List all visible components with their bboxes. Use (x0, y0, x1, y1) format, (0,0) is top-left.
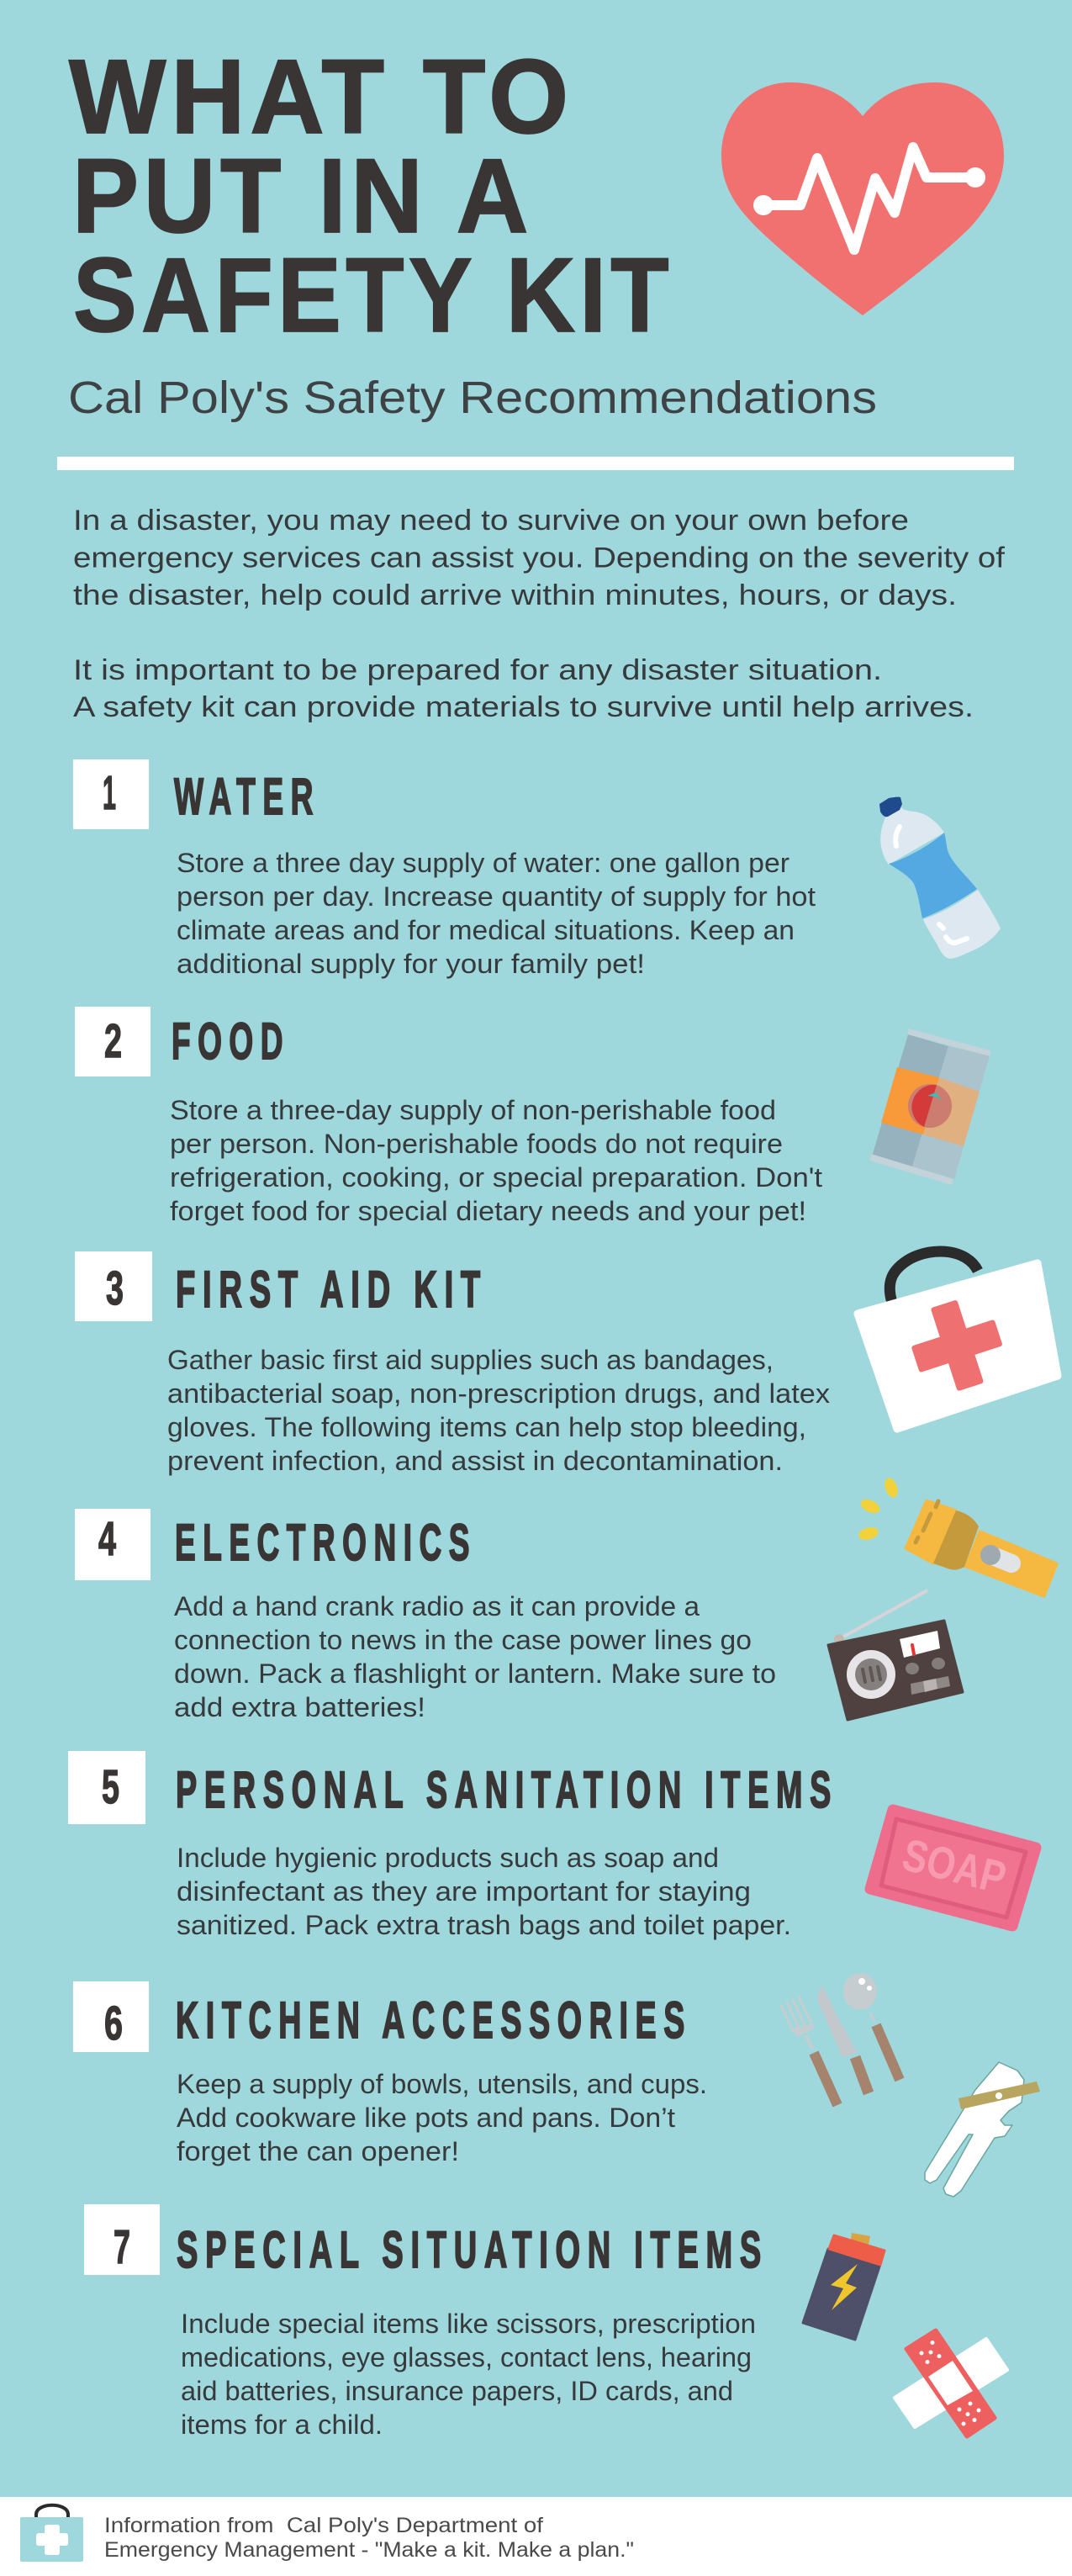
body text: kitchen accessories: forget the can opener! (177, 2136, 459, 2166)
panel: 1 water (73, 759, 1001, 979)
intro text: It is important to be prepared for any disaster situation. (73, 654, 882, 686)
panel: 6 kitchen accessories (73, 1973, 1040, 2197)
body text: water: climate areas and for medical situations. Keep an (177, 915, 795, 945)
number badge 4: 4 (98, 1512, 116, 1566)
icon: first aid kit (858, 1251, 1058, 1429)
icon: flashlight (858, 1476, 1058, 1597)
body text: kitchen accessories: Add cookware like pots and pans. Don’t (177, 2103, 675, 2133)
icon: battery (803, 2233, 885, 2340)
footer (0, 2497, 1072, 2576)
body text: electronics: add extra batteries! (174, 1692, 425, 1722)
title: WHAT TO (69, 39, 573, 156)
number badge 2 (75, 1007, 151, 1076)
number badge 3 (75, 1251, 152, 1321)
number badge 6: 6 (104, 1997, 123, 2050)
body text: special situation items: medications, eye glasses, contact lens, hearing (181, 2342, 752, 2372)
footer text (104, 2514, 634, 2562)
body text: electronics (174, 1591, 776, 1722)
icon: fork, knife and spoon (781, 1973, 900, 2105)
heading: food: FOOD (172, 1013, 290, 1070)
body text: personal sanitation items: sanitized. Pack extra trash bags and toilet paper. (177, 1910, 791, 1940)
body text: food: refrigeration, cooking, or special preparation. Don't (170, 1162, 822, 1193)
body text: kitchen accessories: Keep a supply of bowls, utensils, and cups. (177, 2069, 707, 2099)
body text: special situation items: aid batteries, insurance papers, ID cards, and (181, 2376, 733, 2406)
intro text: emergency services can assist you. Depending on the severity of (73, 542, 1006, 574)
number badge 7: 7 (114, 2220, 130, 2274)
footer text: Emergency Management - "Make a kit. Make a plan." (104, 2538, 634, 2562)
number badge 5 (68, 1751, 145, 1824)
heading: first aid kit: FIRST AID KIT (176, 1261, 488, 1318)
number badge 2: 2 (104, 1014, 122, 1068)
footer text: Information from Cal Poly's Department of (104, 2514, 543, 2537)
body text: first aid kit (167, 1345, 830, 1476)
intro text: In a disaster, you may need to survive on your own before (73, 505, 909, 537)
icon: soap bar: SOAP (898, 1829, 1011, 1904)
body text: first aid kit: antibacterial soap, non-prescription drugs, and latex (167, 1378, 830, 1409)
body text: first aid kit: gloves. The following items can help stop bleeding, (167, 1412, 806, 1442)
number badge 7 (84, 2204, 160, 2275)
number badge 4 (75, 1509, 151, 1580)
panel: 2 food (75, 1007, 990, 1226)
body text: water (177, 848, 816, 979)
body text: first aid kit: Gather basic first aid supplies such as bandages, (167, 1345, 774, 1375)
icon: footer first aid bag (20, 2505, 83, 2562)
intro text: A safety kit can provide materials to survive until help arrives. (73, 691, 974, 723)
number badge 6 (73, 1981, 149, 2052)
body text: personal sanitation items (177, 1843, 791, 1940)
intro text: the disaster, help could arrive within minutes, hours, or days. (73, 579, 957, 611)
icon: food can (870, 1029, 990, 1185)
body text: kitchen accessories (177, 2069, 707, 2166)
title: SAFETY KIT (73, 237, 673, 354)
body text: food: Store a three-day supply of non-perishable food (170, 1095, 776, 1125)
panel: 3 first aid kit (75, 1251, 1058, 1476)
icon: heart with heartbeat line (721, 82, 1004, 315)
body text: electronics: down. Pack a flashlight or lantern. Make sure to (174, 1658, 776, 1689)
body text: food: per person. Non-perishable foods do not require (170, 1129, 783, 1159)
number badge 3: 3 (106, 1262, 124, 1315)
body text: food: forget food for special dietary needs and your pet! (170, 1196, 806, 1226)
body text: electronics: Add a hand crank radio as it can provide a (174, 1591, 700, 1621)
panel: 7 special situation items (84, 2204, 1007, 2440)
icon: water bottle (879, 797, 1001, 959)
number badge 5: 5 (102, 1760, 119, 1814)
body text: water: Store a three day supply of water: one gallon per (177, 848, 789, 878)
body text: personal sanitation items: disinfectant as they are important for staying (177, 1876, 751, 1907)
body text: electronics: connection to news in the case power lines go (174, 1625, 752, 1655)
body text: water: additional supply for your family pet! (177, 949, 645, 979)
heading: electronics: ELECTRONICS (175, 1514, 477, 1571)
title: PUT IN A (72, 138, 533, 255)
body text: first aid kit: prevent infection, and assist in decontamination. (167, 1446, 783, 1476)
body text: water: person per day. Increase quantity of supply for hot (177, 881, 816, 912)
body text: personal sanitation items: Include hygienic products such as soap and (177, 1843, 719, 1873)
body text: food (170, 1095, 822, 1226)
heading: water: WATER (174, 768, 320, 825)
body text: special situation items: Include special items like scissors, prescription (181, 2309, 756, 2339)
intro text (73, 505, 1006, 723)
icon: soap bar (870, 1810, 1036, 1926)
body text: special situation items: items for a child. (181, 2409, 383, 2440)
icon: bandage (895, 2330, 1007, 2436)
number badge 1: 1 (103, 766, 116, 820)
title (69, 39, 673, 354)
icon: radio (828, 1590, 963, 1720)
panel: 4 electronics (75, 1476, 1058, 1722)
icon: can opener (925, 2062, 1040, 2197)
number badge 1 (73, 759, 149, 829)
panel: 5 personal sanitation items (68, 1751, 1036, 1940)
heading: kitchen accessories: KITCHEN ACCESSORIES (176, 1992, 692, 2049)
body text: special situation items (181, 2309, 756, 2440)
subtitle: Cal Poly's Safety Recommendations (68, 373, 877, 423)
